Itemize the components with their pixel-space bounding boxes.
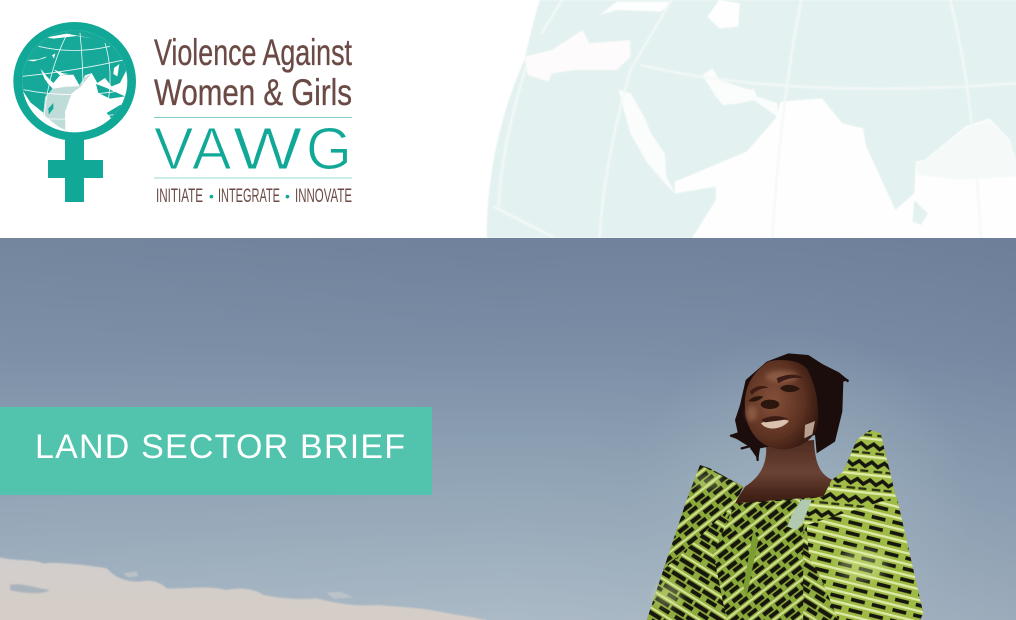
logo tagline: INNOVATE [295, 186, 352, 207]
logo acronym: V [154, 116, 194, 182]
brow, eyes, nose and mouth [748, 375, 815, 438]
hair strands [731, 365, 848, 460]
photo: sky background [0, 238, 1016, 620]
green fold [743, 530, 758, 597]
banner heading: LAND SECTOR BRIEF [35, 428, 405, 466]
dress left sheen [663, 465, 743, 570]
header background [0, 0, 1016, 238]
neck and collar [733, 440, 833, 505]
icon: female symbol with globe [13, 22, 136, 202]
logo tagline: • [285, 188, 290, 204]
logo acronym: A [192, 116, 232, 182]
logo tagline [156, 186, 352, 207]
face highlights [746, 371, 798, 421]
logo tagline: INTEGRATE [218, 186, 280, 207]
head [730, 353, 849, 460]
dress lower right [807, 497, 923, 620]
logo title [154, 32, 353, 113]
dress hem fold [803, 547, 838, 620]
photo: clouds [0, 557, 487, 620]
face [745, 360, 818, 449]
globe landmass [24, 30, 126, 86]
logo title: Violence Against [154, 32, 353, 73]
dress highlights [654, 475, 886, 607]
logo acronym: G [306, 116, 352, 182]
faded globe map [487, 0, 1016, 238]
banner: land sector brief [0, 407, 432, 495]
dress left body [647, 430, 923, 620]
logo [13, 22, 353, 207]
dress right sleeve [800, 430, 897, 527]
logo title: Women & Girls [154, 72, 352, 113]
brooch [787, 499, 812, 530]
logo tagline: • [209, 188, 214, 204]
hair [730, 353, 849, 460]
photo: woman in green patterned dress [647, 353, 923, 620]
logo acronym: W [233, 116, 302, 182]
logo tagline: INITIATE [156, 186, 203, 207]
dress centre panel [713, 500, 803, 620]
